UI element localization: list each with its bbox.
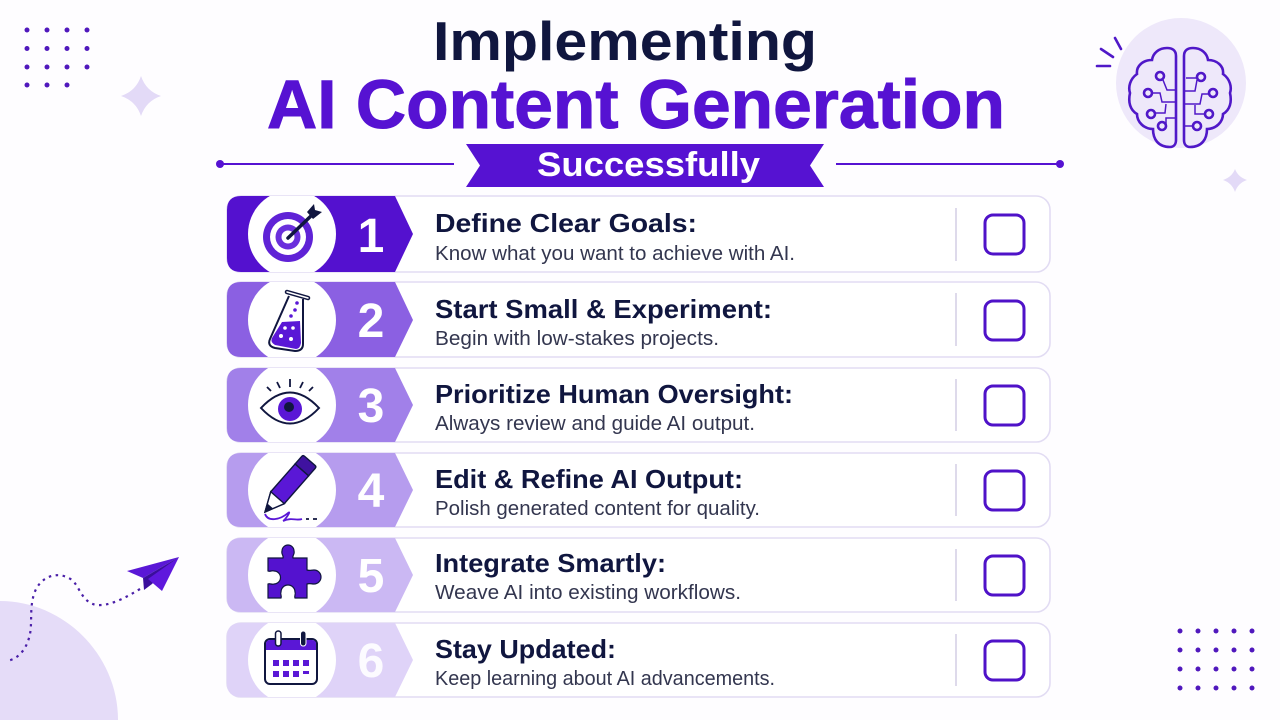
icon: pencil (248, 453, 336, 527)
decoration: sparkle left (121, 76, 161, 116)
icon: brain (1097, 18, 1246, 148)
icon: eye (248, 368, 336, 442)
step 6 row (226, 622, 1051, 698)
step 2 description: Begin with low-stakes projects. (435, 328, 719, 350)
step 2 checkbox (985, 301, 1024, 340)
title: Implementing: Implementing (433, 10, 817, 72)
step 1 row (226, 195, 1051, 273)
step 4 row (226, 452, 1051, 528)
ribbon: Successfully (466, 144, 824, 187)
step 2 heading: Start Small & Experiment: (435, 294, 772, 324)
step 3 heading: Prioritize Human Oversight: (435, 379, 793, 409)
step 5 row (226, 537, 1051, 613)
step 4 number: 4 (358, 465, 385, 518)
step 2 badge (227, 282, 413, 357)
icon: flask (248, 282, 336, 357)
step 1 description: Know what you want to achieve with AI. (435, 243, 795, 265)
step 5 checkbox (985, 556, 1024, 595)
step 4 checkbox (985, 471, 1024, 510)
icon: target (248, 196, 336, 272)
step 6 number: 6 (358, 635, 384, 688)
decoration: sparkle right (1223, 169, 1247, 192)
step 1 number: 1 (358, 210, 384, 263)
step 4 badge (227, 453, 413, 527)
step 6 heading: Stay Updated: (435, 634, 616, 664)
step 2 row (226, 281, 1051, 358)
step 4 heading: Edit & Refine AI Output: (435, 464, 743, 494)
divider line right (836, 160, 1064, 168)
icon: paper plane (127, 557, 179, 591)
step 1 heading: Define Clear Goals: (435, 208, 697, 238)
step 3 badge (227, 368, 413, 442)
step 6 checkbox (985, 641, 1024, 680)
step 6 description: Keep learning about AI advancements. (435, 668, 775, 690)
step 3 description: Always review and guide AI output. (435, 413, 755, 435)
ribbon: Successfully: Successfully (537, 146, 760, 184)
decoration: dots bottom right (1178, 628, 1254, 690)
step 5 number: 5 (358, 550, 384, 603)
step 5 badge (227, 538, 413, 612)
step 2 number: 2 (358, 295, 384, 348)
decoration: dots top left (24, 28, 90, 88)
step 1 checkbox (985, 215, 1024, 254)
icon: dashed flight path (6, 575, 140, 661)
title: AI Content Generation: AI Content Generation (267, 66, 1005, 143)
step 1 badge (227, 196, 413, 272)
step 3 number: 3 (358, 380, 384, 433)
step 5 heading: Integrate Smartly: (435, 548, 666, 578)
step 3 checkbox (985, 386, 1024, 425)
step 3 row (226, 367, 1051, 443)
step 5 description: Weave AI into existing workflows. (435, 582, 741, 604)
icon: calendar (248, 623, 336, 697)
decoration: corner circle (0, 601, 118, 720)
step 6 badge (227, 623, 413, 697)
icon: puzzle piece (248, 538, 336, 612)
step 4 description: Polish generated content for quality. (435, 498, 760, 520)
divider line left (216, 160, 454, 168)
